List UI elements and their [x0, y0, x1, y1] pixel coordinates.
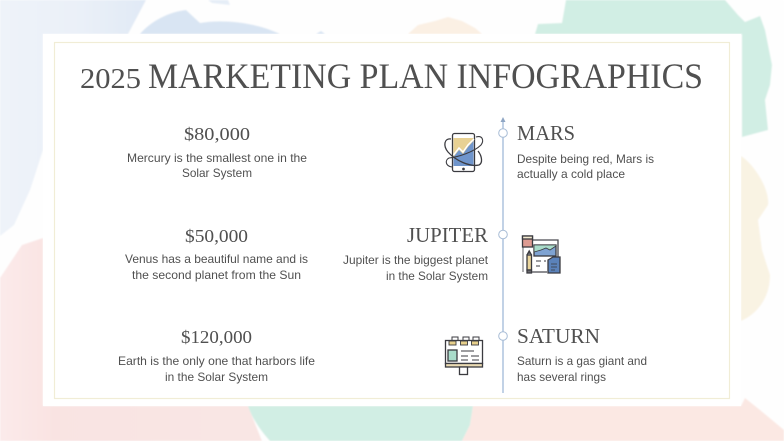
- icon: calendar, chart, pencil and document: [522, 236, 560, 273]
- block: Jupiter: Jupiter is the biggest planet: [343, 253, 489, 267]
- block: $120,000: Earth is the only one that harbors life: [118, 354, 315, 368]
- block: $50,000: [125, 226, 308, 282]
- block: Mars: actually a cold place: [517, 167, 625, 181]
- block: Saturn: has several rings: [517, 370, 606, 384]
- block: $80,000: Mercury is the smallest one in the: [127, 151, 307, 165]
- panel inner border: [54, 42, 730, 398]
- timeline node: Mars: [499, 129, 507, 137]
- block: Jupiter: [343, 223, 489, 283]
- block: $80,000: $80,000: [184, 124, 250, 144]
- block: $120,000: [118, 327, 315, 384]
- block: $50,000: $50,000: [185, 226, 248, 246]
- block: $120,000: in the Solar System: [165, 370, 268, 384]
- block: $80,000: [127, 124, 307, 180]
- timeline node: Jupiter: [499, 230, 507, 239]
- title: MARKETING PLAN INFOGRAPHICS: [148, 56, 703, 96]
- white panel: [43, 34, 741, 406]
- block: Mars: [517, 121, 654, 181]
- block: $50,000: Venus has a beautiful name and is: [125, 252, 308, 266]
- timeline node: Saturn: [499, 332, 507, 340]
- block: $50,000: the second planet from the Sun: [132, 268, 301, 282]
- block: Saturn: SATURN: [517, 324, 600, 348]
- title: 2025: [80, 64, 141, 95]
- block: Jupiter: JUPITER: [407, 223, 488, 247]
- timeline: vertical line with arrow: [500, 117, 506, 393]
- block: Mars: MARS: [517, 121, 575, 145]
- icon: billboard: [446, 337, 482, 374]
- block: $80,000: Solar System: [182, 166, 252, 180]
- icon: phone with chart and orbits: [445, 134, 483, 172]
- block: Saturn: Saturn is a gas giant and: [517, 354, 647, 368]
- block: Mars: Despite being red, Mars is: [517, 152, 654, 166]
- block: Jupiter: in the Solar System: [386, 269, 488, 283]
- block: Saturn: [517, 324, 647, 384]
- block: $120,000: $120,000: [181, 327, 252, 347]
